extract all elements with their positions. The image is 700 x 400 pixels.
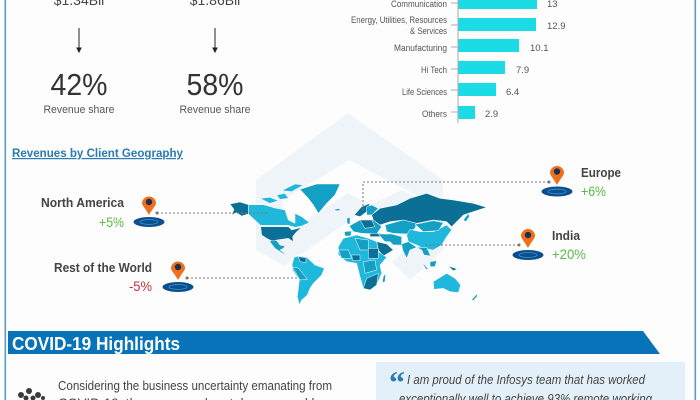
heading banner: COVID-19 highlights bbox=[8, 331, 660, 354]
quote panel: “ bbox=[389, 364, 405, 400]
bar chart: revenue by industry: Energy, Utilities, Resources bbox=[351, 15, 447, 25]
bar chart: revenue by industry: 10.1 bbox=[530, 43, 548, 54]
callout: India: +20% bbox=[552, 246, 586, 262]
heading banner: COVID-19 highlights: COVID-19 Highlights bbox=[12, 334, 180, 354]
callout: India: India bbox=[552, 228, 581, 243]
callout: Rest of the World bbox=[54, 260, 298, 294]
bar chart: revenue by industry: Life Sciences bbox=[402, 87, 447, 97]
bar chart: revenue by industry: 12.9 bbox=[547, 21, 566, 32]
bar chart: revenue by industry: Others bbox=[422, 109, 447, 119]
text block: business uncertainty bbox=[58, 378, 332, 400]
heading: revenues by client geography: Revenues by Client Geography bbox=[12, 146, 183, 160]
bar chart: revenue by industry: 2.9 bbox=[485, 109, 498, 120]
bar chart: revenue by industry: Hi Tech bbox=[421, 65, 447, 75]
callout: Europe: +6% bbox=[581, 183, 606, 199]
callout: Rest of the World: Rest of the World bbox=[54, 260, 152, 275]
bar chart: revenue by industry: Manufacturing bbox=[394, 43, 447, 53]
callout: Rest of the World: -5% bbox=[129, 278, 152, 294]
arrow down bbox=[213, 28, 217, 52]
stat: 58% revenue share bbox=[180, 0, 250, 116]
icon: people network bbox=[18, 388, 45, 400]
bar chart: revenue by industry: & Services bbox=[410, 26, 447, 36]
callout: Europe bbox=[363, 165, 621, 212]
bar chart: revenue by industry bbox=[351, 0, 566, 123]
bar chart: revenue by industry: 6.4 bbox=[506, 87, 519, 98]
stat: 42% revenue share: Revenue share bbox=[44, 104, 114, 116]
text block: business uncertainty: Considering the business uncertainty emanating from bbox=[58, 378, 332, 393]
stat: 42% revenue share bbox=[44, 0, 114, 116]
callout: North America bbox=[41, 195, 267, 230]
callout: North America: +5% bbox=[99, 214, 124, 230]
callout: India bbox=[423, 228, 586, 262]
world map bbox=[230, 184, 487, 305]
stat: 42% revenue share: 42% bbox=[50, 67, 108, 102]
callout: Europe: Europe bbox=[581, 165, 621, 180]
quote panel: I am proud of the Infosys team that has worked bbox=[407, 373, 646, 387]
background logo watermark bbox=[256, 113, 443, 280]
quote panel bbox=[376, 362, 685, 400]
bar chart: revenue by industry: 7.9 bbox=[516, 65, 529, 76]
callout: North America: North America bbox=[41, 195, 125, 210]
stat: 58% revenue share: 58% bbox=[186, 67, 244, 102]
stat: 58% revenue share: Revenue share bbox=[180, 104, 250, 116]
arrow down bbox=[77, 28, 81, 52]
